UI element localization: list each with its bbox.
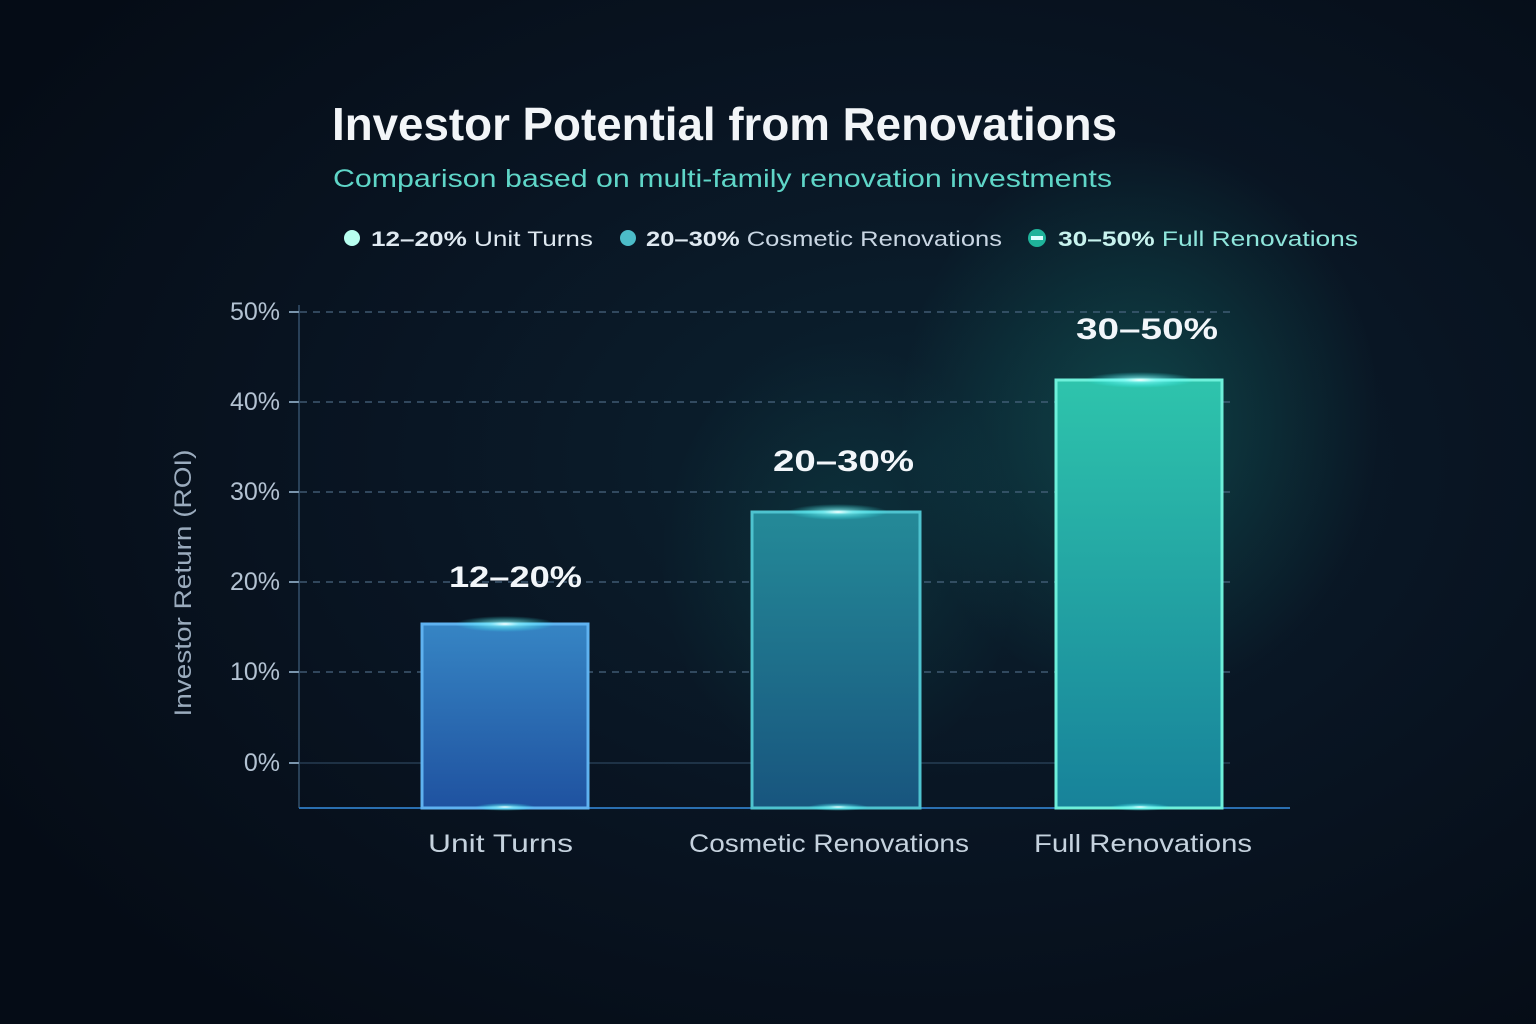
y axis: 40% (230, 388, 280, 416)
y axis: 0% (244, 749, 280, 777)
bar: cosmetic: 20–30% (773, 445, 914, 478)
y axis: 10% (230, 658, 280, 686)
legend: 12–20% Unit Turns (371, 228, 593, 251)
legend: 30–50% Full Renovations (1058, 228, 1358, 251)
y axis: 50% (230, 298, 280, 326)
axis title: Investor Return (ROI) (170, 450, 197, 716)
y axis (230, 298, 1230, 808)
bar: unit turns: 12–20% (449, 561, 582, 594)
legend: 20–30% Cosmetic Renovations (646, 228, 1002, 251)
category labels: Unit Turns (428, 830, 573, 858)
baseline (299, 807, 1290, 809)
bar: cosmetic (752, 445, 920, 811)
bar: full (1056, 313, 1222, 811)
category labels (428, 830, 1252, 858)
title: Investor Potential from Renovations (332, 98, 1117, 150)
category labels: Full Renovations (1034, 830, 1252, 858)
y axis: 20% (230, 568, 280, 596)
legend (344, 228, 1358, 251)
bar: full: 30–50% (1076, 313, 1218, 346)
y axis: 30% (230, 478, 280, 506)
bar: unit turns (422, 561, 588, 811)
subtitle: Comparison based on multi-family renovation investments (333, 165, 1112, 193)
category labels: Cosmetic Renovations (689, 830, 969, 858)
